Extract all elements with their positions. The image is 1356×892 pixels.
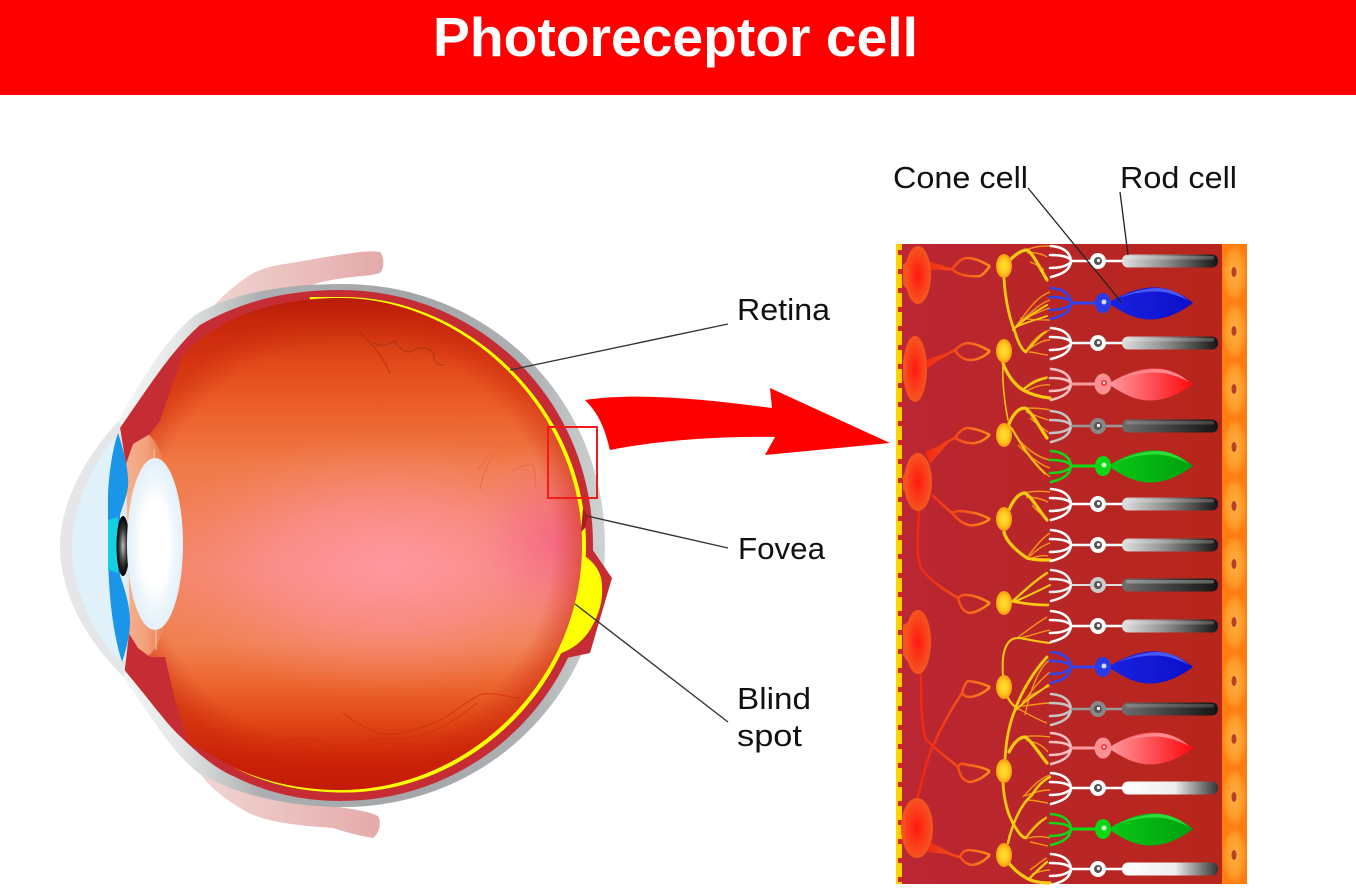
blue cone cell 2 (1050, 651, 1193, 684)
label: Fovea (587, 516, 826, 566)
arrow to retina detail (585, 388, 890, 455)
panel: retina cell layers (896, 244, 1247, 885)
green cone cell 1 (1050, 450, 1193, 482)
label: Fovea: Fovea (738, 531, 826, 566)
lower eye muscle (190, 760, 380, 838)
bipolar cell bodies (996, 254, 1012, 867)
eye cross-section (60, 251, 645, 838)
bipolar cell axons (1003, 250, 1050, 883)
title: Photoreceptor cell (433, 6, 918, 68)
pigment epithelium column (1222, 244, 1247, 884)
choroid layer (120, 290, 593, 801)
red cone cell 1 (1050, 368, 1193, 400)
green cone cell 2 (1050, 813, 1193, 846)
pupil (116, 516, 130, 576)
white rod cell 10 (1050, 854, 1218, 885)
retina yellow layer (233, 297, 586, 792)
label: Cone cell: Cone cell (893, 160, 1028, 195)
globe pink glow (196, 450, 582, 682)
inner globe (125, 298, 582, 790)
aqueous chamber (72, 433, 128, 663)
white rod cell 9 (1050, 773, 1218, 804)
magnified retina marker (548, 427, 597, 498)
retinal veins (285, 332, 535, 750)
label: Blind spot: Blind (737, 681, 811, 716)
label: Retina (510, 292, 831, 370)
ganglion cells (901, 246, 933, 858)
rod cell 7 (1050, 611, 1218, 642)
cornea (60, 421, 130, 677)
label: Blind spot (575, 604, 811, 753)
iris (108, 433, 130, 662)
ciliary body upper (120, 325, 200, 467)
bipolar cell dendrites (1012, 246, 1050, 874)
ciliary body lower (122, 632, 233, 776)
ganglion connections (917, 258, 990, 865)
dark rod cell 3 (1050, 411, 1218, 442)
blind spot optic disc (545, 557, 602, 655)
fovea notch (581, 508, 588, 532)
upper eye muscle (195, 251, 383, 340)
label: Blind spot: spot (737, 718, 802, 753)
outer limiting strip (896, 244, 902, 884)
label: Rod cell: Rod cell (1120, 160, 1237, 195)
rod cell 5 (1050, 530, 1218, 561)
blue cone cell 1 (1050, 287, 1193, 320)
label: Retina: Retina (737, 292, 831, 327)
lens surround (105, 431, 175, 659)
panel background (900, 244, 1224, 884)
rod cell 1 (1050, 246, 1218, 277)
rod cell 6 (1050, 570, 1218, 601)
rod cell 2 (1050, 328, 1218, 359)
red cone cell 2 (1050, 732, 1193, 764)
label: Rod cell (1120, 160, 1237, 255)
header banner (0, 0, 1356, 95)
dark rod cell 8 (1050, 694, 1218, 725)
lens (127, 458, 183, 630)
sclera (100, 284, 605, 807)
blind spot backing (550, 540, 612, 659)
globe edge shading (125, 298, 582, 790)
label: Cone cell (893, 160, 1122, 303)
suspensory fibres (154, 449, 156, 650)
rod cell 4 (1050, 489, 1218, 520)
